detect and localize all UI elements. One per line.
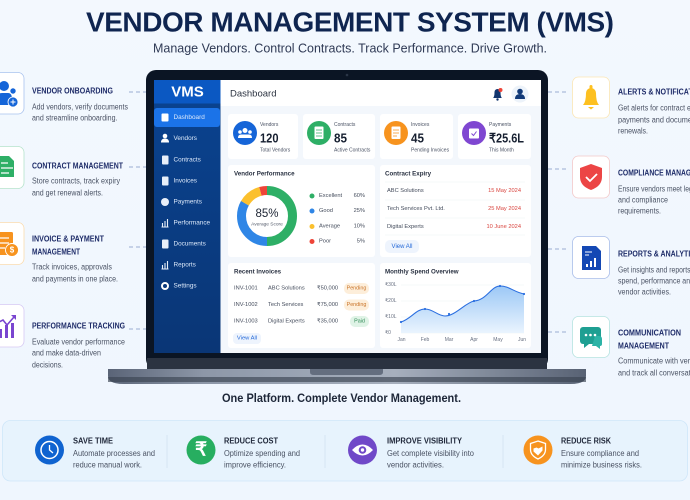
panel: recent invoices: ₹75,000 bbox=[317, 301, 338, 308]
stat card: contracts: 85 bbox=[334, 130, 347, 146]
panel: vendor performance: Average Score bbox=[251, 222, 283, 228]
panel: monthly spend overview: Feb bbox=[421, 337, 430, 343]
panel: recent invoices: Paid bbox=[354, 318, 365, 324]
stat card: payments: Payments bbox=[489, 122, 512, 128]
feature: invoice and payment management: and payments in one place. bbox=[32, 274, 118, 284]
legend: Average bbox=[319, 224, 340, 230]
tagline: One Platform. Complete Vendor Management. bbox=[222, 391, 461, 405]
title: VENDOR MANAGEMENT SYSTEM (VMS) bbox=[86, 6, 614, 38]
feature: invoice and payment management: $ bbox=[10, 246, 15, 254]
benefit: reduce cost bbox=[186, 436, 300, 470]
feature: communication management: COMMUNICATION bbox=[618, 328, 681, 338]
feature: compliance management bbox=[572, 156, 690, 216]
stat card: vendors: 120 bbox=[260, 130, 278, 146]
feature: vendor onboarding: Add vendors, verify documents bbox=[32, 102, 128, 112]
legend: 5% bbox=[357, 238, 365, 244]
stat card: payments: This Month bbox=[489, 148, 514, 154]
dashboard header bbox=[220, 80, 541, 106]
panel: recent invoices: Tech Services bbox=[268, 302, 304, 308]
sidebar: Performance bbox=[174, 220, 211, 226]
stat card: invoices: 45 bbox=[411, 130, 424, 146]
panel: recent invoices: ABC Solutions bbox=[268, 286, 305, 292]
feature: performance tracking: Evaluate vendor performance bbox=[32, 338, 125, 346]
donut chart bbox=[232, 181, 302, 251]
sidebar: Payments bbox=[174, 198, 202, 206]
sidebar bbox=[154, 80, 220, 353]
panel: recent invoices: View All bbox=[237, 336, 257, 342]
benefit: improve visibility bbox=[348, 436, 475, 470]
feature: performance tracking: PERFORMANCE TRACKING bbox=[32, 322, 125, 330]
feature: vendor onboarding: VENDOR ONBOARDING bbox=[32, 86, 113, 96]
panel: recent invoices: INV-1002 bbox=[234, 302, 258, 308]
feature: invoice and payment management: INVOICE & PAYMENT bbox=[32, 234, 104, 244]
panel: contract expiry bbox=[380, 165, 531, 257]
panel: monthly spend overview: Mar bbox=[445, 337, 454, 343]
feature: invoice and payment management bbox=[0, 222, 118, 284]
laptop frame bbox=[146, 70, 548, 369]
panel: contract expiry: 10 June 2024 bbox=[487, 224, 521, 230]
panel: contract expiry: 25 May 2024 bbox=[488, 206, 521, 212]
stat card: invoices bbox=[380, 114, 453, 159]
sidebar: VMS bbox=[171, 84, 204, 100]
feature: reports and analytics: vendor activities. bbox=[618, 288, 671, 296]
feature: performance tracking bbox=[0, 304, 125, 370]
stat card: payments: ₹25.6L bbox=[489, 130, 524, 146]
feature: contract management: Store contracts, track expiry bbox=[32, 176, 120, 186]
panel: monthly spend overview bbox=[380, 263, 531, 348]
stat card: contracts bbox=[303, 114, 375, 159]
panel: monthly spend overview: ₹10L bbox=[385, 314, 397, 320]
feature: contract management: CONTRACT MANAGEMENT bbox=[32, 162, 123, 170]
stat card: contracts: Active Contracts bbox=[334, 148, 371, 154]
panel: recent invoices: ₹35,000 bbox=[317, 318, 338, 324]
panel: contract expiry: Digital Experts bbox=[387, 224, 424, 230]
panel: vendor performance bbox=[228, 165, 375, 257]
feature: invoice and payment management: MANAGEMENT bbox=[32, 248, 80, 256]
stat card: vendors: Total Vendors bbox=[260, 148, 291, 154]
dashboard header: Dashboard bbox=[230, 88, 276, 100]
panel: recent invoices: Recent Invoices bbox=[234, 268, 282, 276]
benefit: improve visibility: IMPROVE VISIBILITY bbox=[387, 436, 463, 446]
feature: compliance management: and compliance bbox=[618, 196, 668, 204]
benefit: save time bbox=[35, 436, 155, 470]
feature: invoice and payment management: Track invoices, approvals bbox=[32, 262, 112, 272]
subtitle: Manage Vendors. Control Contracts. Track Performance. Drive Growth. bbox=[153, 40, 547, 56]
panel: recent invoices: Pending bbox=[347, 302, 366, 308]
benefit: reduce risk: REDUCE RISK bbox=[561, 436, 611, 446]
benefit: reduce risk bbox=[524, 436, 642, 470]
panel: monthly spend overview: ₹0 bbox=[385, 330, 391, 336]
feature: alerts and notifications: renewals. bbox=[618, 126, 648, 136]
panel: recent invoices bbox=[228, 263, 375, 348]
stat card: payments bbox=[458, 114, 531, 159]
sidebar: Vendors bbox=[174, 135, 197, 142]
panel: left features bbox=[0, 72, 128, 370]
feature: contract management bbox=[0, 146, 123, 198]
panel: monthly spend overview: Jan bbox=[397, 337, 406, 343]
area line chart bbox=[400, 285, 525, 333]
feature: compliance management: requirements. bbox=[618, 206, 661, 216]
benefit: reduce cost: ₹ bbox=[195, 440, 207, 460]
camera bbox=[346, 74, 348, 76]
legend: Good bbox=[319, 208, 333, 214]
laptop lower bezel bbox=[147, 358, 547, 369]
feature: vendor onboarding bbox=[0, 72, 128, 122]
panel: monthly spend overview: ₹30L bbox=[385, 282, 397, 288]
legend: Poor bbox=[319, 238, 331, 244]
stat card: vendors bbox=[228, 114, 298, 159]
feature: communication management: MANAGEMENT bbox=[618, 342, 669, 350]
panel: recent invoices: Digital Experts bbox=[268, 318, 305, 324]
panel: monthly spend overview: May bbox=[493, 337, 503, 343]
stat card: contracts: Contracts bbox=[334, 122, 356, 128]
stat card: invoices: Invoices bbox=[411, 122, 430, 128]
panel: monthly spend overview: ₹20L bbox=[385, 298, 397, 304]
benefit: reduce risk: Ensure compliance and bbox=[561, 449, 639, 458]
benefit: improve visibility: vendor activities. bbox=[387, 460, 444, 470]
panel: recent invoices: ₹50,000 bbox=[317, 284, 338, 292]
sidebar: Settings bbox=[174, 282, 197, 290]
benefit: save time: Automate processes and bbox=[73, 449, 155, 458]
benefit: improve visibility: Get complete visibility into bbox=[387, 449, 475, 458]
panel: monthly spend overview: Jun bbox=[518, 337, 526, 343]
benefit: save time: reduce manual work. bbox=[73, 460, 142, 470]
panel: contract expiry: ABC Solutions bbox=[387, 188, 424, 194]
panel: benefits strip bbox=[2, 420, 688, 481]
benefit: reduce risk: minimize business risks. bbox=[561, 460, 642, 470]
benefit: save time: SAVE TIME bbox=[73, 436, 114, 446]
connector lines bbox=[129, 92, 568, 332]
legend: 10% bbox=[354, 224, 365, 230]
panel: recent invoices: INV-1003 bbox=[234, 318, 258, 324]
benefit: reduce cost: Optimize spending and bbox=[224, 449, 300, 458]
legend: 25% bbox=[354, 208, 365, 214]
panel: monthly spend overview: Apr bbox=[470, 337, 478, 343]
panel: contract expiry: 15 May 2024 bbox=[488, 188, 521, 194]
panel: recent invoices: Pending bbox=[347, 286, 366, 292]
feature: alerts and notifications bbox=[572, 77, 690, 136]
sidebar: Invoices bbox=[174, 178, 197, 184]
panel: contract expiry: Tech Services Pvt. Ltd. bbox=[387, 206, 445, 212]
panel: recent invoices: INV-1001 bbox=[234, 286, 258, 292]
sidebar: Contracts bbox=[174, 156, 201, 164]
panel: contract expiry: Contract Expiry bbox=[385, 170, 432, 178]
panel: vendor performance: 85% bbox=[255, 208, 279, 220]
panel: right features bbox=[572, 77, 690, 378]
sidebar: Reports bbox=[174, 262, 196, 268]
legend: Excellent bbox=[319, 193, 342, 199]
panel: vendor performance: Vendor Performance bbox=[234, 170, 295, 178]
feature: vendor onboarding: and streamline onboarding. bbox=[32, 114, 118, 122]
legend: 60% bbox=[354, 193, 365, 199]
screen: dashboard bbox=[154, 80, 541, 353]
stat card: invoices: Pending Invoices bbox=[411, 148, 450, 154]
panel: monthly spend overview: Monthly Spend Overview bbox=[385, 268, 459, 276]
feature: reports and analytics bbox=[572, 236, 690, 296]
feature: performance tracking: and make data-driven bbox=[32, 348, 101, 358]
benefit: reduce cost: improve efficiency. bbox=[224, 460, 286, 470]
stat card: vendors: Vendors bbox=[260, 122, 279, 128]
legend bbox=[310, 193, 365, 244]
sidebar: Dashboard bbox=[174, 114, 205, 121]
laptop base bbox=[108, 369, 586, 384]
feature: contract management: and get renewal alerts. bbox=[32, 188, 103, 198]
feature: performance tracking: decisions. bbox=[32, 360, 63, 370]
feature: communication management bbox=[572, 316, 690, 378]
panel: contract expiry: View All bbox=[392, 244, 412, 250]
sidebar: Documents bbox=[174, 240, 206, 248]
benefit: reduce cost: REDUCE COST bbox=[224, 436, 278, 446]
